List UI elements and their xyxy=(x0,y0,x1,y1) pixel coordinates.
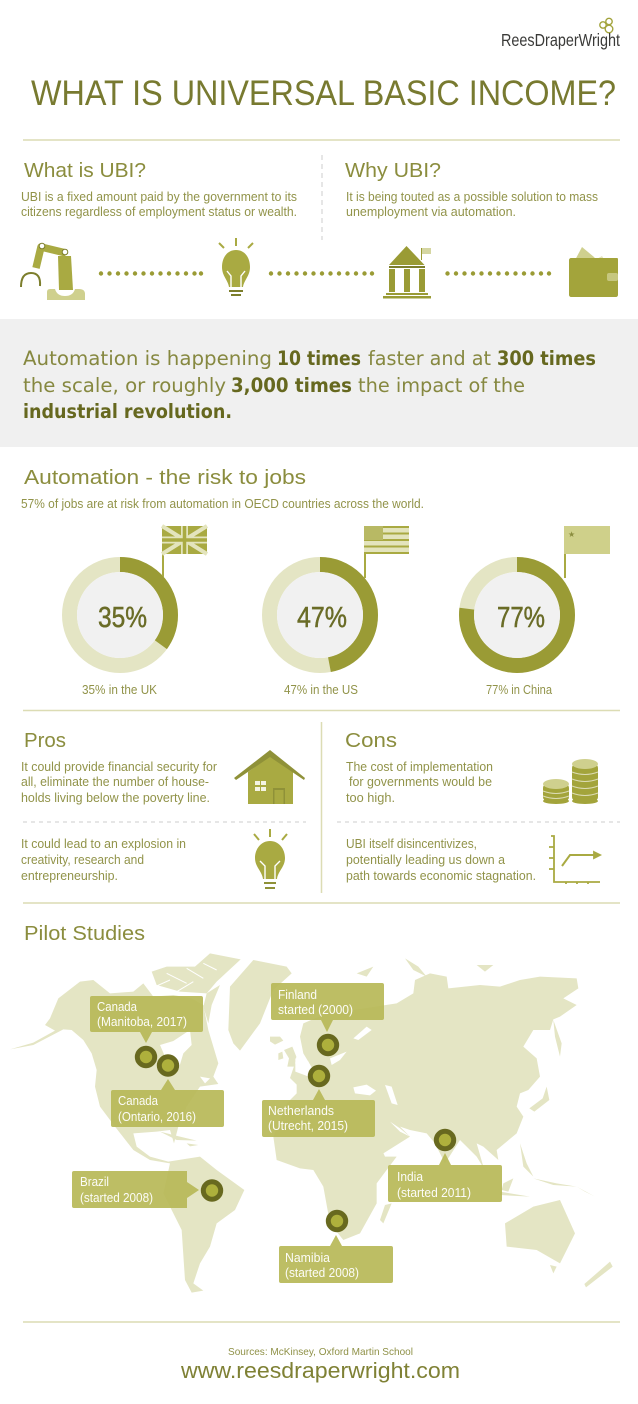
callout: India: (started 2011) xyxy=(397,1186,471,1200)
text: OECD risk: 57% of jobs are at risk from automation in OECD countries across the world. xyxy=(21,497,424,511)
chart: China donut: 77% xyxy=(497,602,545,634)
dotted connector xyxy=(445,271,551,276)
chart: China donut: 77% in China xyxy=(486,683,552,697)
icon: flat-lining chart xyxy=(549,836,600,884)
website url: www.reesdraperwright.com xyxy=(180,1358,460,1383)
heading: pilot studies: Pilot Studies xyxy=(24,923,145,945)
panel: why UBI: Why UBI? xyxy=(345,160,441,182)
callout: Finland: started (2000) xyxy=(278,1003,353,1017)
panel: pros: all, eliminate the number of house- xyxy=(21,775,209,789)
callout: Finland: Finland xyxy=(278,988,317,1002)
callout: Brazil: (started 2008) xyxy=(80,1191,153,1205)
panel: pros: creativity, research and xyxy=(21,853,144,867)
callout: Brazil xyxy=(72,1171,199,1208)
callout: Finland xyxy=(271,983,384,1032)
panel: pros: holds living below the poverty line. xyxy=(21,791,210,805)
logo: ReesDraperWright xyxy=(501,18,620,50)
chart: US donut xyxy=(270,526,409,697)
panel: why UBI xyxy=(345,160,598,219)
panel: headline band: industrial revolution. xyxy=(23,400,232,423)
callout: Namibia: Namibia xyxy=(285,1251,330,1265)
panel: headline band: 10 times xyxy=(277,347,361,370)
panel: headline band: faster and at xyxy=(368,347,491,370)
chart: UK donut xyxy=(70,526,207,697)
panel: cons: Cons xyxy=(345,730,397,752)
panel: cons: path towards economic stagnation. xyxy=(346,869,536,883)
panel: what is UBI: citizens regardless of employment status or wealth. xyxy=(21,205,297,219)
chart: US donut: 47% xyxy=(297,602,347,634)
icon: bank building xyxy=(383,246,431,298)
callout: Namibia: (started 2008) xyxy=(285,1266,359,1280)
icon: US flag xyxy=(364,526,409,554)
callout: Canada Ontario: (Ontario, 2016) xyxy=(118,1110,196,1124)
panel: pros: It could lead to an explosion in xyxy=(21,837,186,851)
callout: Canada Manitoba: (Manitoba, 2017) xyxy=(97,1015,187,1029)
panel: headline band: Automation is happening xyxy=(23,347,272,370)
dotted connector xyxy=(269,271,374,276)
callout: Canada Manitoba xyxy=(90,996,203,1043)
panel: why UBI: It is being touted as a possible solution to mass xyxy=(346,190,598,204)
panel: pros: It could provide financial security for xyxy=(21,760,217,774)
panel: cons: for governments would be xyxy=(349,775,492,789)
callout: Brazil: Brazil xyxy=(80,1175,109,1189)
callout: Canada Manitoba: Canada xyxy=(97,1000,137,1014)
icon: China flag xyxy=(564,526,610,554)
icon: coin stacks xyxy=(543,759,598,804)
callout: Canada Ontario xyxy=(111,1079,224,1127)
dotted connector xyxy=(99,271,203,276)
callout: India: India xyxy=(397,1170,423,1184)
icon: light bulb xyxy=(254,829,287,889)
chart: US donut: 47% in the US xyxy=(284,683,358,697)
panel: pros: entrepreneurship. xyxy=(21,869,118,883)
panel: what is UBI: What is UBI? xyxy=(24,160,146,182)
icon: wallet xyxy=(569,247,618,297)
panel: why UBI: unemployment via automation. xyxy=(346,205,516,219)
callout: Netherlands: (Utrecht, 2015) xyxy=(268,1119,348,1133)
panel: cons: potentially leading us down a xyxy=(346,853,505,867)
icon: house xyxy=(234,750,305,804)
panel: cons xyxy=(345,730,600,884)
icon: light bulb xyxy=(219,238,253,296)
callout: Namibia xyxy=(279,1235,393,1283)
panel: what is UBI xyxy=(21,160,297,219)
chart: China donut xyxy=(466,526,610,697)
panel: headline band: 300 times xyxy=(497,347,596,370)
panel: headline band xyxy=(0,319,638,447)
panel: cons: The cost of implementation xyxy=(346,760,493,774)
icon: UK flag xyxy=(162,526,207,554)
panel: pros: Pros xyxy=(24,730,66,752)
panel: headline band: the impact of the xyxy=(358,374,525,397)
chart: UK donut: 35% in the UK xyxy=(82,683,158,697)
callout: Canada Ontario: Canada xyxy=(118,1094,158,1108)
panel: pros xyxy=(21,730,305,889)
map markers xyxy=(137,1036,454,1230)
panel: cons: too high. xyxy=(346,791,395,805)
panel: headline band: 3,000 times xyxy=(231,374,352,397)
panel: headline band: the scale, or roughly xyxy=(23,374,226,397)
world map xyxy=(10,953,613,1293)
chart: UK donut: 35% xyxy=(98,602,147,634)
panel: what is UBI: UBI is a fixed amount paid by the government to its xyxy=(21,190,297,204)
panel: cons: UBI itself disincentivizes, xyxy=(346,837,477,851)
heading: automation risk: Automation - the risk to jobs xyxy=(24,467,306,489)
callout: Netherlands xyxy=(262,1089,375,1137)
sources: Sources: McKinsey, Oxford Martin School xyxy=(228,1346,413,1358)
callout: India xyxy=(388,1153,502,1202)
callout: Netherlands: Netherlands xyxy=(268,1104,334,1118)
icon: China flag: ★ xyxy=(568,530,575,539)
icon: robot arm xyxy=(21,243,85,300)
